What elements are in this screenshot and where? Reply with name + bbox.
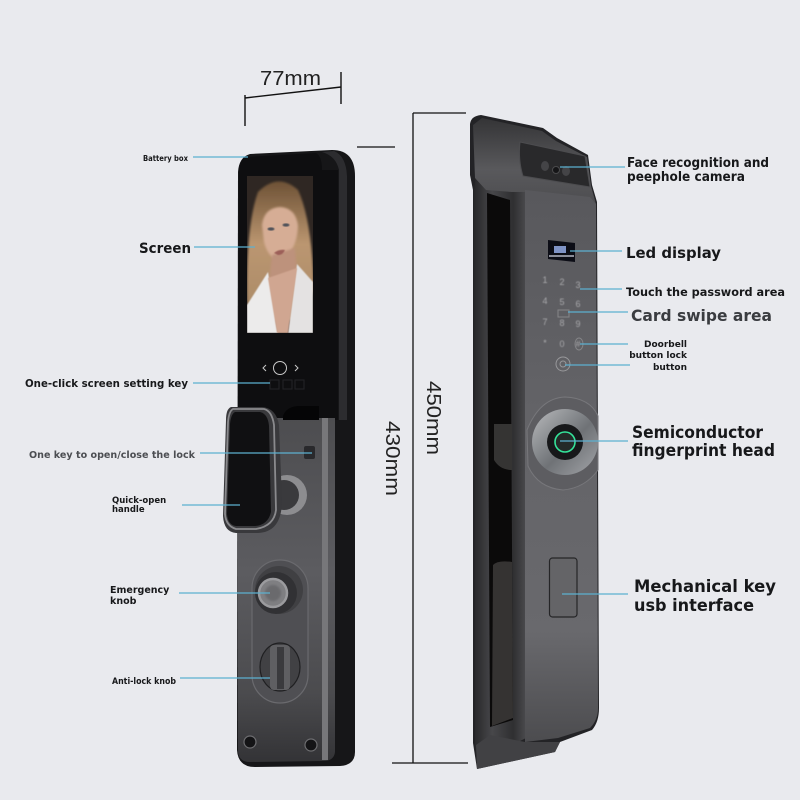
label: card swipe: Card swipe area [631,306,772,325]
doorbell ring [575,338,583,350]
display recess [283,406,319,420]
keypad: 7 [542,317,548,327]
top cap [473,118,596,204]
handle spindle [267,475,307,515]
front lock panel [223,150,355,767]
dimension: height [357,113,468,763]
keypad: 1 [542,275,548,285]
mechanical key cover [550,558,577,617]
label: touch password: Touch the password area [626,285,785,299]
dimension: width [245,68,341,126]
keypad: * [543,338,547,348]
plate edge stripes [322,418,328,760]
left labels [25,154,195,687]
keypad: # [575,339,581,349]
camera module [519,142,590,187]
label: anti-lock knob: Anti-lock knob [112,677,176,687]
lock body silhouette [237,150,355,767]
quick-open handle [223,407,282,533]
handle parts in channel [492,561,513,726]
screen photo [247,176,314,333]
label: led display: Led display [626,244,721,262]
label: one-click key: One-click screen setting key [25,377,188,390]
handle channel [487,193,513,727]
keypad: 2 [559,277,565,287]
side lock panel [470,115,599,769]
label: fingerprint head: Semiconductor [632,423,764,442]
label: battery box: Battery box [143,154,188,163]
width value: 77mm [260,68,321,90]
label: fingerprint head: fingerprint head [632,441,775,460]
left rail [474,175,526,762]
label: emergency knob: knob [110,596,137,607]
lock button [556,357,570,371]
right labels [626,155,785,615]
label: face recognition: Face recognition and [627,155,769,171]
keypad: 9 [575,319,581,329]
screen setting keys [263,362,298,374]
anti-lock knob [260,643,300,691]
label: doorbell and lock button: button [653,363,687,373]
label: emergency knob: Emergency [110,585,170,596]
keypad: 0 [559,339,565,349]
label: doorbell and lock button: Doorbell [644,340,687,350]
bottom foot [476,735,560,769]
label: face recognition: peephole camera [627,169,745,185]
fingerprint module [527,397,598,490]
label: key and usb: usb interface [634,596,754,615]
label: open close: One key to open/close the lock [29,450,195,461]
keypad: 3 [575,280,581,290]
side edge highlight [322,151,347,420]
screws [244,736,317,751]
label: screen: Screen [139,241,191,257]
keypad: 6 [575,299,581,309]
handle neck [494,424,512,470]
keypad: 8 [559,318,565,328]
callout lines [179,157,630,678]
height value 430mm: 430mm [381,421,403,496]
card swipe icon [558,310,569,317]
glass front [238,153,338,420]
keypad [542,275,581,349]
faint touch squares [270,380,304,389]
keypad: 5 [559,297,565,307]
keypad: 4 [542,296,548,306]
lock side silhouette [470,115,599,769]
label: quick-open handle: Quick-open [112,496,166,506]
oval recess [252,560,308,703]
emergency knob [255,566,303,614]
label: quick-open handle: handle [112,505,145,515]
height value 450mm: 450mm [422,381,444,455]
label: key and usb: Mechanical key [634,577,776,596]
front plate [525,190,598,742]
open close button [304,446,315,459]
LED display [548,240,575,262]
metal plate [238,418,335,762]
label: doorbell and lock button: button lock [629,351,688,361]
